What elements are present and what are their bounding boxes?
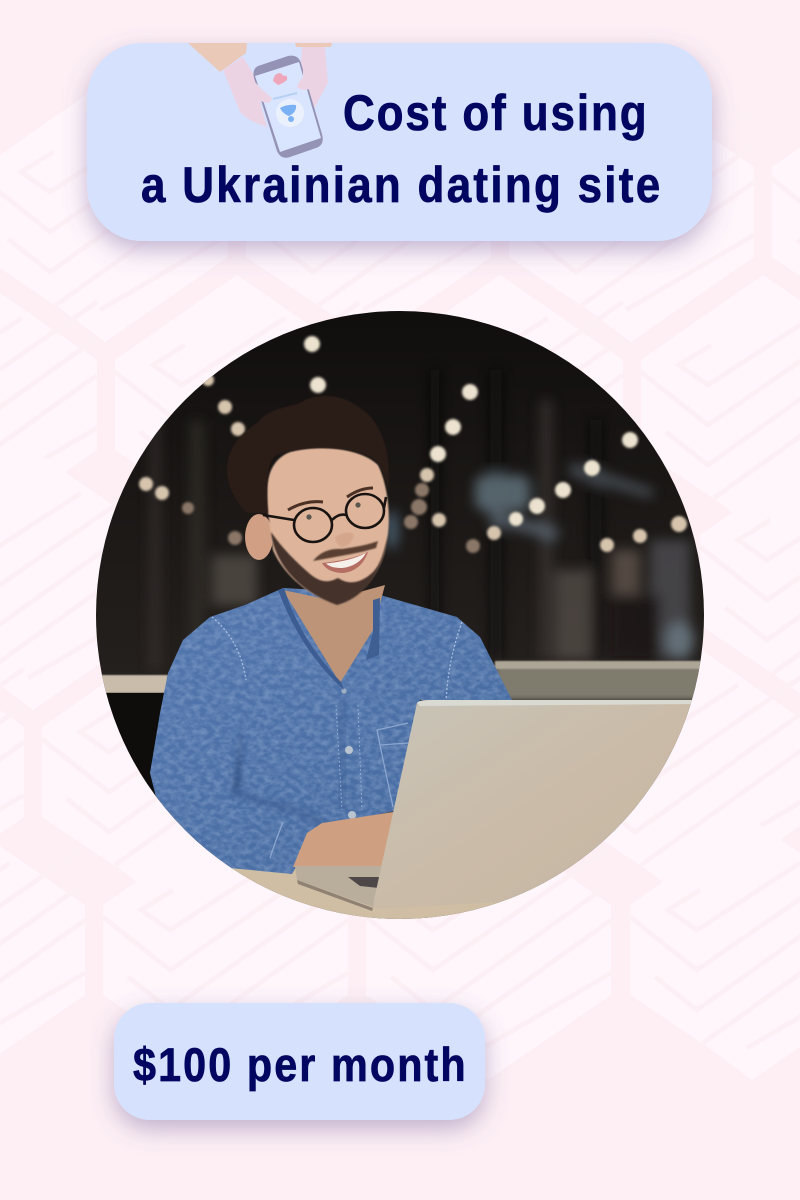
shirt [150,585,515,875]
bokeh lights [139,336,687,553]
head [245,448,389,605]
title panel [87,43,712,241]
beard [271,532,388,605]
photo: smiling man at a laptop [90,305,710,925]
price text: $100 per month [133,1040,466,1092]
counter ledge [100,675,168,693]
price panel [114,1003,485,1120]
glasses [263,494,386,542]
shirt buttons [345,746,353,754]
table [232,868,501,919]
neck [283,585,385,683]
heading text: Cost of using [343,84,647,141]
icon: hands holding phone [188,43,332,158]
hair [227,396,389,513]
heading text [141,84,660,213]
heading text: a Ukrainian dating site [141,156,660,213]
blurred cafe background [90,305,710,925]
laptop and hand [293,700,700,911]
